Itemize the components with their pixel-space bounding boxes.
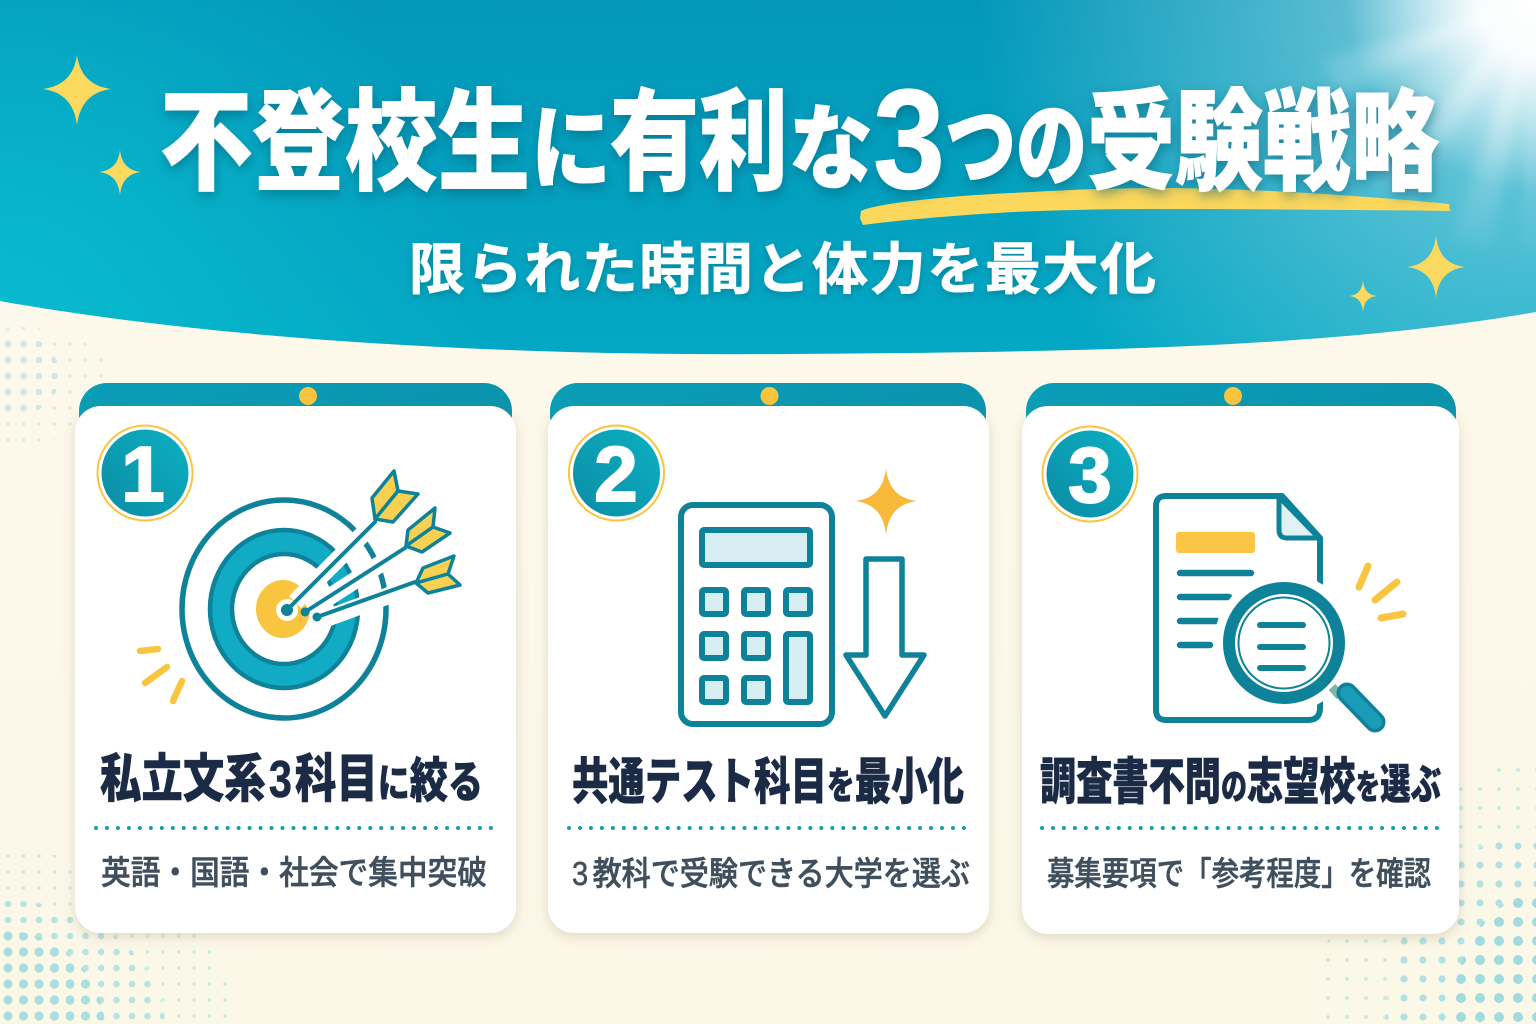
card 2 divider [569, 826, 964, 830]
card 3 description: 募集要項で「参考程度」を確認 [1047, 855, 1431, 892]
halftone dots: top left [0, 327, 115, 443]
title: 受験戦略 [1087, 82, 1439, 205]
subtitle: 限られた時間と体力を最大化 [409, 238, 1156, 301]
yellow brush underline [860, 188, 1450, 225]
title: に [531, 99, 611, 201]
title: 有利 [610, 82, 788, 205]
card 1 divider [96, 826, 493, 830]
card 1 description: 英語・国語・社会で集中突破 [101, 854, 487, 891]
card 3 heading: 調査書不問の志望校を選ぶ [1040, 754, 1441, 810]
header banner [0, 0, 1536, 360]
title: な [789, 99, 873, 201]
title [160, 60, 1439, 219]
sparkle: top left small [99, 150, 141, 195]
number badge 2 [569, 426, 664, 520]
panel: card 1 [75, 383, 516, 933]
icon: document with magnifier [1156, 496, 1403, 722]
panel: card 2 [548, 383, 989, 933]
card 3 top tab [1026, 383, 1456, 443]
card 1 body [75, 406, 516, 933]
icon: sparkle [855, 468, 917, 535]
halftone dots: bottom right [1316, 764, 1536, 1024]
sparkle: right small [1349, 280, 1377, 312]
number badge 3: 3 [1068, 431, 1112, 519]
card 2 top tab [550, 383, 986, 443]
number badge 2: 2 [594, 430, 638, 518]
number badge 3 [1042, 426, 1138, 522]
title: つの [945, 96, 1087, 198]
panel: card 3 [1022, 383, 1459, 934]
card 3 body [1022, 406, 1459, 934]
card 2 body [548, 406, 989, 933]
title: 不登校生 [160, 82, 530, 205]
number badge 1 [98, 426, 192, 520]
icon: down arrow [846, 559, 924, 716]
halftone dots: bottom left [0, 850, 235, 1024]
card 2 heading: 共通テスト科目を最小化 [572, 754, 964, 810]
icon: target with three arrows [140, 471, 460, 718]
card 3 divider [1042, 826, 1440, 830]
title: 3 [873, 60, 945, 219]
card 1 top tab [79, 383, 512, 443]
sparkle: right large [1407, 236, 1465, 298]
card 1 heading: 私立文系3科目に絞る [100, 751, 483, 809]
sparkle: top left large [43, 55, 111, 125]
number badge 1: 1 [121, 430, 165, 518]
icon: calculator [681, 505, 832, 724]
card 2 description: 3教科で受験できる大学を選ぶ [572, 855, 970, 892]
